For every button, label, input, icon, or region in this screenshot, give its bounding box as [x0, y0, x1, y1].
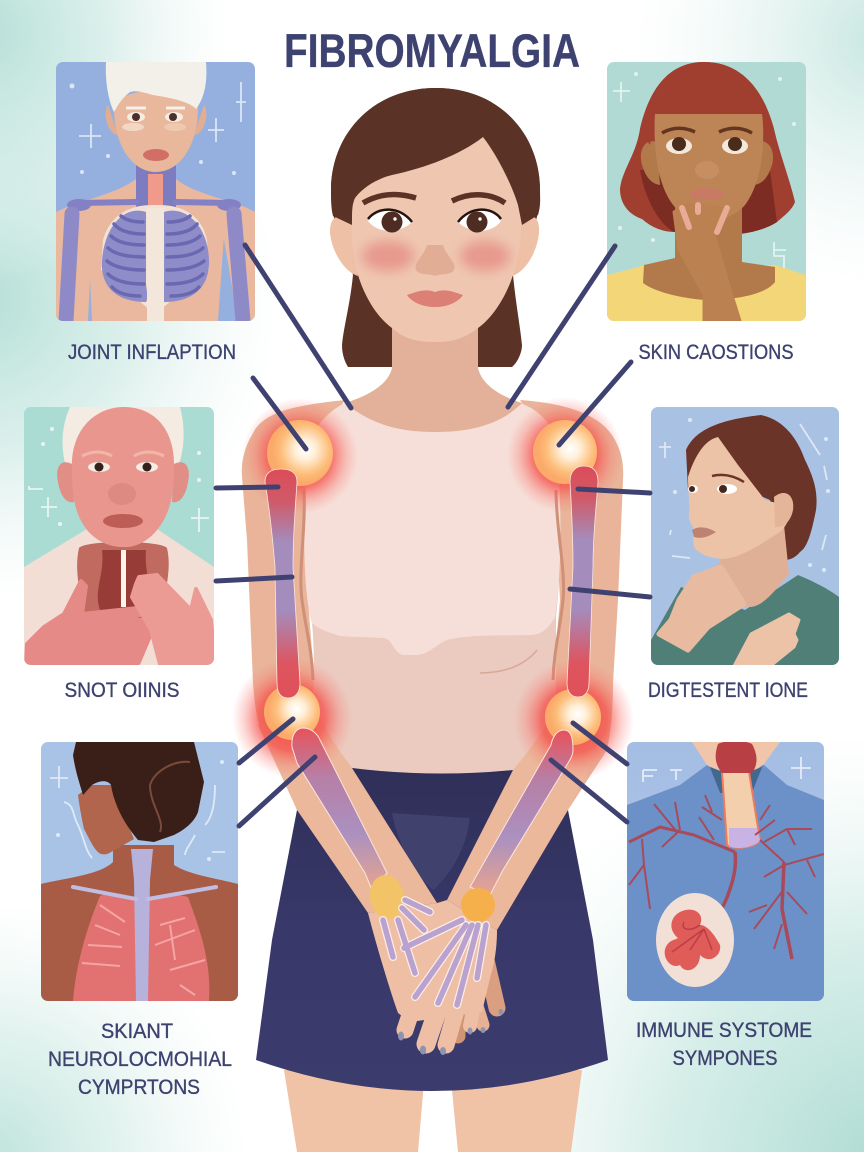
branches: [629, 795, 824, 959]
arm left: [242, 400, 437, 913]
sparkles: [613, 72, 796, 268]
trachea: [148, 174, 163, 209]
ears: [641, 141, 773, 185]
sparkles: [70, 82, 246, 175]
label: immune symptoms: [636, 1019, 812, 1070]
upper arm bone right: [567, 466, 598, 697]
hands: [366, 872, 504, 1055]
ribs: [107, 216, 204, 296]
collar bones: [79, 202, 229, 203]
arm creases: [301, 490, 564, 680]
shirt fold: [480, 650, 537, 673]
nails: [398, 1009, 504, 1055]
hair front: [331, 88, 540, 225]
nose: [695, 161, 719, 179]
white tube: [121, 550, 126, 607]
mouth: [689, 188, 725, 200]
trachea: [722, 772, 760, 848]
ear: [774, 493, 793, 527]
eyes: [82, 452, 164, 472]
body: [627, 765, 824, 1001]
front fingers: [405, 985, 478, 1045]
coat: [24, 529, 214, 665]
lung right: [146, 895, 209, 1001]
top fabric: [304, 403, 560, 655]
forearm bone left: [292, 728, 387, 890]
hand bones: [383, 900, 486, 1005]
face: [688, 437, 791, 559]
forearm right: [447, 715, 610, 930]
panel: snot: [24, 407, 216, 668]
shoulder shadows: [715, 772, 757, 792]
lower hand: [733, 614, 799, 668]
connector lines: [216, 245, 650, 826]
organ vessels: [672, 922, 712, 952]
neck: [643, 205, 775, 300]
skirt shadow: [392, 813, 470, 890]
hand: [674, 205, 740, 321]
face: [655, 112, 763, 221]
central figure: [232, 88, 634, 1152]
wrist yellow left: [366, 872, 408, 922]
right hand: [132, 575, 216, 668]
throat red: [716, 741, 756, 773]
mouth: [103, 514, 143, 528]
label: neuro symptoms: NEUROLOCMOHIAL: [48, 1048, 232, 1071]
face side: [78, 785, 134, 854]
back fingers: [458, 960, 497, 1036]
eyes: [688, 475, 744, 494]
sparkles: [29, 427, 209, 532]
torso top: [304, 403, 560, 775]
eyes: [662, 128, 752, 154]
label: neuro symptoms: CYMPRTONS: [78, 1076, 200, 1099]
joint elbow right: [545, 689, 601, 745]
joint shoulder left: [267, 420, 333, 486]
organ circle: [656, 893, 734, 987]
throat: [98, 550, 150, 610]
label: digestive: DIGTESTENT IONE: [648, 679, 808, 702]
face: [352, 120, 521, 342]
joint elbow left: [264, 684, 320, 740]
label: skin cautions: SKIN CAOSTIONS: [638, 341, 794, 364]
ears: [57, 462, 189, 502]
head: [72, 407, 174, 547]
label: immune symptoms: SYMPONES: [672, 1047, 778, 1070]
label: neuro symptoms: SKIANT: [101, 1020, 173, 1043]
nose: [415, 245, 455, 276]
hair shadow: [640, 170, 777, 234]
mouth: [692, 527, 716, 538]
upper arm bone left: [265, 469, 300, 698]
hair: [63, 407, 184, 467]
nose: [108, 483, 136, 505]
title: FIBROMYALGIA: [284, 24, 580, 77]
lung left: [73, 893, 139, 1001]
face: [114, 91, 198, 172]
neck: [136, 165, 176, 208]
chest: [88, 235, 224, 321]
sparkles: [50, 760, 225, 861]
hand bones outlines: [383, 900, 486, 1005]
lower throat: [107, 640, 137, 665]
hair back: [331, 88, 540, 367]
label: immune symptoms: IMMUNE SYSTOME: [636, 1019, 812, 1042]
panel: digestive: [651, 407, 839, 668]
inflammation halos: [232, 397, 634, 780]
skirt: [256, 768, 608, 1091]
neck: [715, 525, 789, 607]
panel: neuro symptoms: [41, 742, 238, 1001]
hair: [620, 62, 795, 234]
shoulder joints: [67, 199, 91, 211]
label: neuro symptoms: [48, 1020, 232, 1099]
mouth: [143, 149, 169, 161]
neck and chest: [345, 320, 522, 432]
legs: [284, 1070, 582, 1152]
panel: joint inflammation: [56, 62, 255, 321]
hair: [73, 742, 204, 842]
neck: [77, 542, 169, 625]
sparkles: [659, 418, 830, 572]
wrist yellow right: [461, 888, 495, 922]
panel: skin cautions: [607, 62, 806, 321]
rib cage frame: [101, 205, 209, 310]
forearm left: [258, 715, 437, 913]
neck skin: [692, 742, 780, 775]
back: [41, 845, 238, 1001]
cheeks: [362, 241, 510, 271]
panel: immune symptoms: [627, 741, 824, 1001]
sparkles: [643, 757, 811, 782]
lung left: [102, 211, 147, 302]
spine: [147, 285, 164, 321]
label: snot: SNOT OIINIS: [64, 679, 180, 702]
shirt: [607, 265, 806, 321]
label: joint inflation: JOINT INFLAPTION: [68, 341, 236, 364]
palms: [368, 900, 497, 1022]
hair: [686, 415, 817, 560]
lilac base: [729, 828, 760, 848]
curl: [150, 762, 190, 832]
mouth: [407, 290, 463, 307]
ears: [106, 105, 206, 135]
upper hand: [659, 567, 744, 650]
eyes: [122, 108, 186, 131]
forearm bone right: [470, 730, 573, 895]
left hand: [26, 581, 156, 668]
shirt: [651, 575, 839, 665]
ears: [330, 216, 539, 276]
lung veins: [82, 905, 205, 995]
eyes: [363, 195, 505, 232]
fringe: [640, 62, 774, 145]
spine: [131, 849, 153, 1001]
joint shoulder right: [533, 420, 597, 484]
organ: [665, 910, 720, 970]
arm right: [447, 400, 623, 930]
lung right: [163, 211, 209, 302]
fingertips: [682, 205, 727, 232]
shoulders and torso: [56, 179, 255, 321]
collar: [73, 887, 216, 899]
hair: [106, 62, 206, 112]
arm bones: [66, 214, 243, 321]
